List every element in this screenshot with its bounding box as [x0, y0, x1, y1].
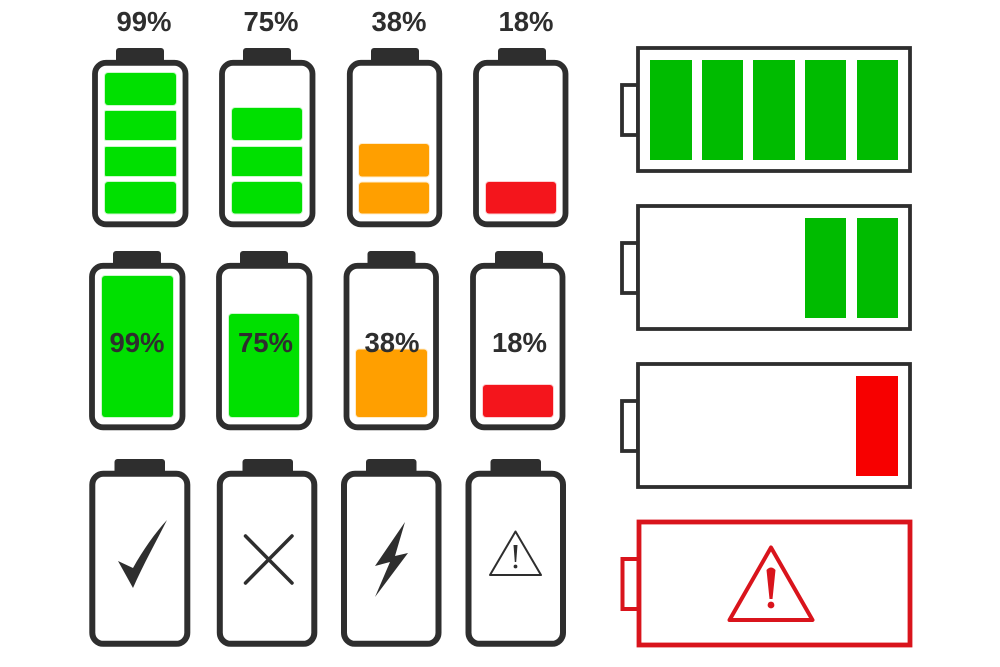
icon: lightning bolt: [375, 522, 408, 597]
icon: check mark: [118, 520, 167, 588]
battery row 2: 75%: [219, 251, 310, 427]
battery row 1: 18%: [476, 48, 566, 224]
battery with cross: [220, 459, 314, 644]
horizontal battery: full: [622, 48, 910, 171]
battery with check mark: [92, 459, 187, 644]
percentage label 75%: 75%: [243, 6, 299, 37]
battery row 2: 18%: 18%: [492, 327, 547, 358]
icon: cross: [246, 536, 292, 583]
battery row 2: 99%: [92, 251, 182, 427]
battery row 2: 18%: [473, 251, 562, 427]
horizontal battery: red warning: [622, 522, 910, 645]
battery row 2: 99%: 99%: [109, 327, 165, 358]
battery row 2: 75%: 75%: [238, 327, 293, 358]
battery row 1: 99%: [95, 48, 186, 224]
battery row 2: 38%: [346, 251, 436, 427]
percentage label 38%: 38%: [371, 6, 427, 37]
battery with warning triangle: [468, 459, 563, 644]
percentage label 99%: 99%: [116, 6, 172, 37]
battery row 1: 38%: [350, 48, 439, 224]
battery row 2: 38%: 38%: [364, 327, 420, 358]
horizontal battery: low red bar: [622, 364, 910, 487]
horizontal battery: two bars: [622, 206, 910, 329]
icon: warning triangle: [490, 532, 541, 575]
icon: red warning triangle: [730, 548, 812, 620]
percentage label 18%: 18%: [498, 6, 554, 37]
battery with lightning bolt: [344, 459, 438, 644]
battery row 1: 75%: [222, 48, 312, 224]
